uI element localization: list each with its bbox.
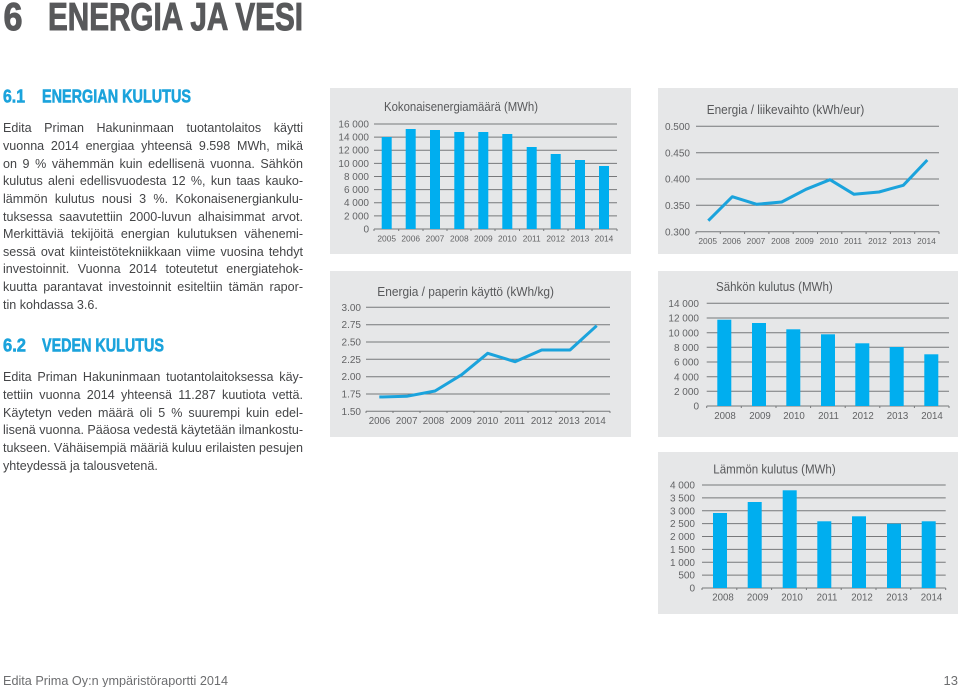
panel: Lämmön kulutus bar chart: 3 000 <box>670 506 695 517</box>
text block: energian kulutus: sessä ovat kiinteistötekniikkaan viime vuosina tehdyt <box>3 245 303 259</box>
panel: Kokonaisenergiamäärä bar chart: 4 000 <box>344 198 369 209</box>
panel: Sähkön kulutus bar chart: 8 000 <box>674 343 699 354</box>
heading: 6.1 energian kulutus <box>3 86 191 106</box>
panel: Kokonaisenergiamäärä bar chart: 2010 <box>498 234 517 244</box>
panel: Lämmön kulutus bar chart: 0 <box>689 584 695 595</box>
panel: Energia / paperin käyttö line chart: 1.50 <box>342 407 361 418</box>
panel: Energia / paperin käyttö line chart: 2010 <box>477 416 499 427</box>
panel: Energia / paperin käyttö line chart: 2.50 <box>342 338 361 348</box>
panel: Kokonaisenergiamäärä bar chart: Kokonaisenergiamäärä (MWh) <box>384 100 538 114</box>
panel: Sähkön kulutus bar chart <box>658 271 958 437</box>
panel: Sähkön kulutus bar chart: 2008 <box>714 411 736 422</box>
text block: veden kulutus: yhteydessä ja talousvetenä. <box>3 458 158 472</box>
panel: Energia / paperin käyttö line chart: 1.75 <box>342 390 361 400</box>
panel: Kokonaisenergiamäärä bar chart: 16 000 <box>338 120 369 130</box>
panel: Lämmön kulutus bar chart: 2014 <box>921 592 943 604</box>
text block: energian kulutus <box>3 121 303 312</box>
panel: Energia / liikevaihto line chart: 2014 <box>917 236 936 246</box>
panel: Energia / paperin käyttö line chart: 2007 <box>396 416 417 427</box>
text block: energian kulutus: Edita Priman Hakuninmaan tuotantolaitos käytti <box>3 121 303 135</box>
panel: Energia / liikevaihto line chart: 2008 <box>771 236 790 246</box>
heading: 6.2 veden kulutus: VEDEN KULUTUS <box>42 335 164 356</box>
panel: Lämmön kulutus bar chart: 2 500 <box>670 519 695 530</box>
panel: Kokonaisenergiamäärä bar chart: 6 000 <box>344 185 369 196</box>
panel: Sähkön kulutus bar chart: 10 000 <box>668 328 699 339</box>
panel: Lämmön kulutus bar chart: 500 <box>678 571 695 582</box>
panel: Lämmön kulutus bar chart: 2012 <box>851 592 873 604</box>
panel: Energia / paperin käyttö line chart: 2.25 <box>342 355 361 366</box>
text block: veden kulutus <box>3 370 303 472</box>
panel: Energia / paperin käyttö line chart: 2014 <box>584 416 606 427</box>
panel: Energia / paperin käyttö line chart: 3.00 <box>342 303 361 314</box>
text block: veden kulutus: lisenä vuonna. Pääosa vedestä käytetään ilmankostu- <box>3 423 303 437</box>
panel: Kokonaisenergiamäärä bar chart: 2008 <box>450 234 469 244</box>
panel: Energia / paperin käyttö line chart: 2011 <box>504 416 525 427</box>
panel: Energia / liikevaihto line chart: 0.400 <box>665 175 690 186</box>
heading: 6.1 energian kulutus: 6.1 <box>3 86 25 106</box>
text block: veden kulutus: Edita Priman Hakuninmaan tuotantolaitoksessa käy- <box>3 370 303 384</box>
panel: Lämmön kulutus bar chart: 4 000 <box>670 481 695 492</box>
panel: Energia / paperin käyttö line chart: 2013 <box>558 416 580 427</box>
panel: Kokonaisenergiamäärä bar chart: 14 000 <box>338 133 369 144</box>
panel: Energia / liikevaihto line chart: 2011 <box>844 236 862 246</box>
panel: Energia / paperin käyttö line chart: 2008 <box>423 416 444 427</box>
panel: Lämmön kulutus bar chart: 3 500 <box>670 494 695 504</box>
panel: Lämmön kulutus bar chart: 2 000 <box>670 532 695 543</box>
panel: Sähkön kulutus bar chart: 12 000 <box>668 314 699 325</box>
panel: Sähkön kulutus bar chart: Sähkön kulutus (MWh) <box>716 280 833 294</box>
panel: Kokonaisenergiamäärä bar chart: 2014 <box>595 234 614 244</box>
panel: Lämmön kulutus bar chart: 2011 <box>817 592 837 604</box>
text block: energian kulutus: lämmön kulutus nousi 3 %. Kokonaisenergiankulu- <box>3 192 303 206</box>
text block: energian kulutus: tuksessa saavutettiin 2000-luvun alhaisimmat arvot. <box>3 210 303 224</box>
panel: Lämmön kulutus bar chart: 2013 <box>886 592 908 604</box>
text block: veden kulutus: tettiin vuonna 2014 yhteensä 11.287 kuutiota vettä. <box>3 388 303 402</box>
panel: Sähkön kulutus bar chart: 2014 <box>921 411 943 422</box>
panel: Lämmön kulutus bar chart: 1 000 <box>670 558 695 569</box>
text block: energian kulutus: Merkittäviä tekijöitä energian kulutuksen vähenemi- <box>3 227 303 241</box>
panel: Energia / liikevaihto line chart: 2010 <box>820 236 839 246</box>
panel: Lämmön kulutus bar chart: Lämmön kulutus (MWh) <box>713 462 836 476</box>
panel: Kokonaisenergiamäärä bar chart: 2005 <box>377 234 396 244</box>
panel: Kokonaisenergiamäärä bar chart: 8 000 <box>344 172 369 183</box>
text block: energian kulutus: kuutta parantavat investoinnit esiteltiin tämän rapor- <box>3 280 303 294</box>
panel: Sähkön kulutus bar chart: 2010 <box>783 411 805 422</box>
panel: Energia / liikevaihto line chart: 0.500 <box>665 122 690 133</box>
panel: Energia / liikevaihto line chart: 2005 <box>698 236 717 246</box>
panel: Sähkön kulutus bar chart: 2 000 <box>674 387 699 398</box>
text block: veden kulutus: tukseen. Vähäisempiä määriä kuluu erilaisten pesujen <box>3 441 303 455</box>
panel: Energia / liikevaihto line chart <box>658 88 958 254</box>
panel: Energia / liikevaihto line chart: 2009 <box>795 236 814 246</box>
panel: Sähkön kulutus bar chart: 4 000 <box>674 372 699 383</box>
panel: Lämmön kulutus bar chart: 1 500 <box>670 545 695 556</box>
panel: Kokonaisenergiamäärä bar chart: 2 000 <box>344 211 369 222</box>
text block: energian kulutus: investoinnit. Vuonna 2014 toteutetut energiatehok- <box>3 262 303 276</box>
panel: Energia / paperin käyttö line chart: 2006 <box>369 416 390 427</box>
panel: Sähkön kulutus bar chart: 2011 <box>818 411 839 422</box>
panel: Sähkön kulutus bar chart: 6 000 <box>674 358 699 369</box>
panel: Energia / liikevaihto line chart: 2007 <box>747 236 766 246</box>
panel: Kokonaisenergiamäärä bar chart: 2006 <box>401 234 420 244</box>
panel: Energia / liikevaihto line chart: 0.350 <box>665 201 690 212</box>
panel: Kokonaisenergiamäärä bar chart: 10 000 <box>338 159 369 170</box>
text block: energian kulutus: kulutus aleni edellisvuodesta 12 %, kun taas kauko- <box>3 174 303 188</box>
heading: 6.2 veden kulutus <box>3 335 164 356</box>
panel: Lämmön kulutus bar chart: 2010 <box>781 592 803 604</box>
panel: Energia / liikevaihto line chart: 0.300 <box>665 227 690 238</box>
panel: Kokonaisenergiamäärä bar chart: 12 000 <box>338 146 369 157</box>
panel: Kokonaisenergiamäärä bar chart: 2007 <box>426 234 445 244</box>
title <box>4 0 303 39</box>
panel: Sähkön kulutus bar chart: 0 <box>693 402 699 413</box>
text block: energian kulutus: vuonna 2014 energiaa yhteensä 9.598 MWh, mikä <box>3 139 303 153</box>
panel: Sähkön kulutus bar chart: 2012 <box>852 411 874 422</box>
panel: Energia / paperin käyttö line chart: 2.00 <box>342 372 361 383</box>
panel: Kokonaisenergiamäärä bar chart <box>330 88 631 254</box>
panel: Sähkön kulutus bar chart: 2009 <box>749 411 771 422</box>
panel: Kokonaisenergiamäärä bar chart: 2013 <box>571 234 590 244</box>
panel: Kokonaisenergiamäärä bar chart: 0 <box>363 224 369 236</box>
panel: Lämmön kulutus bar chart <box>658 452 958 614</box>
panel: Lämmön kulutus bar chart: 2009 <box>747 592 768 604</box>
panel: Energia / liikevaihto line chart: Energia / liikevaihto (kWh/eur) <box>707 103 864 117</box>
panel: Sähkön kulutus bar chart: 2013 <box>887 411 908 422</box>
text block: energian kulutus: tin kohdassa 3.6. <box>3 298 98 312</box>
panel: Energia / liikevaihto line chart: 2012 <box>868 236 887 246</box>
panel: Kokonaisenergiamäärä bar chart: 2012 <box>546 234 565 244</box>
panel: Energia / paperin käyttö line chart <box>330 271 631 437</box>
panel: Energia / paperin käyttö line chart: 2.75 <box>342 320 361 331</box>
panel: Lämmön kulutus bar chart: 2008 <box>712 592 734 604</box>
heading: 6.2 veden kulutus: 6.2 <box>3 335 26 356</box>
panel: Kokonaisenergiamäärä bar chart: 2009 <box>474 234 493 244</box>
panel: Energia / liikevaihto line chart: 2013 <box>893 236 912 246</box>
panel: Sähkön kulutus bar chart: 14 000 <box>668 299 699 310</box>
heading: 6.1 energian kulutus: ENERGIAN KULUTUS <box>42 86 191 106</box>
panel: Energia / paperin käyttö line chart: 2012 <box>531 416 552 427</box>
panel: Energia / liikevaihto line chart: 0.450 <box>665 148 690 159</box>
panel: Energia / paperin käyttö line chart: Energia / paperin käyttö (kWh/kg) <box>377 285 554 299</box>
text block: veden kulutus: Käytetyn veden määrä oli 5 % suurempi kuin edel- <box>3 406 303 420</box>
panel: Energia / paperin käyttö line chart: 2009 <box>450 416 472 427</box>
panel: Kokonaisenergiamäärä bar chart: 2011 <box>523 234 541 244</box>
panel: Energia / liikevaihto line chart: 2006 <box>722 236 741 246</box>
text block: energian kulutus: on 9 % vähemmän kuin edellisenä vuonna. Sähkön <box>3 157 303 171</box>
